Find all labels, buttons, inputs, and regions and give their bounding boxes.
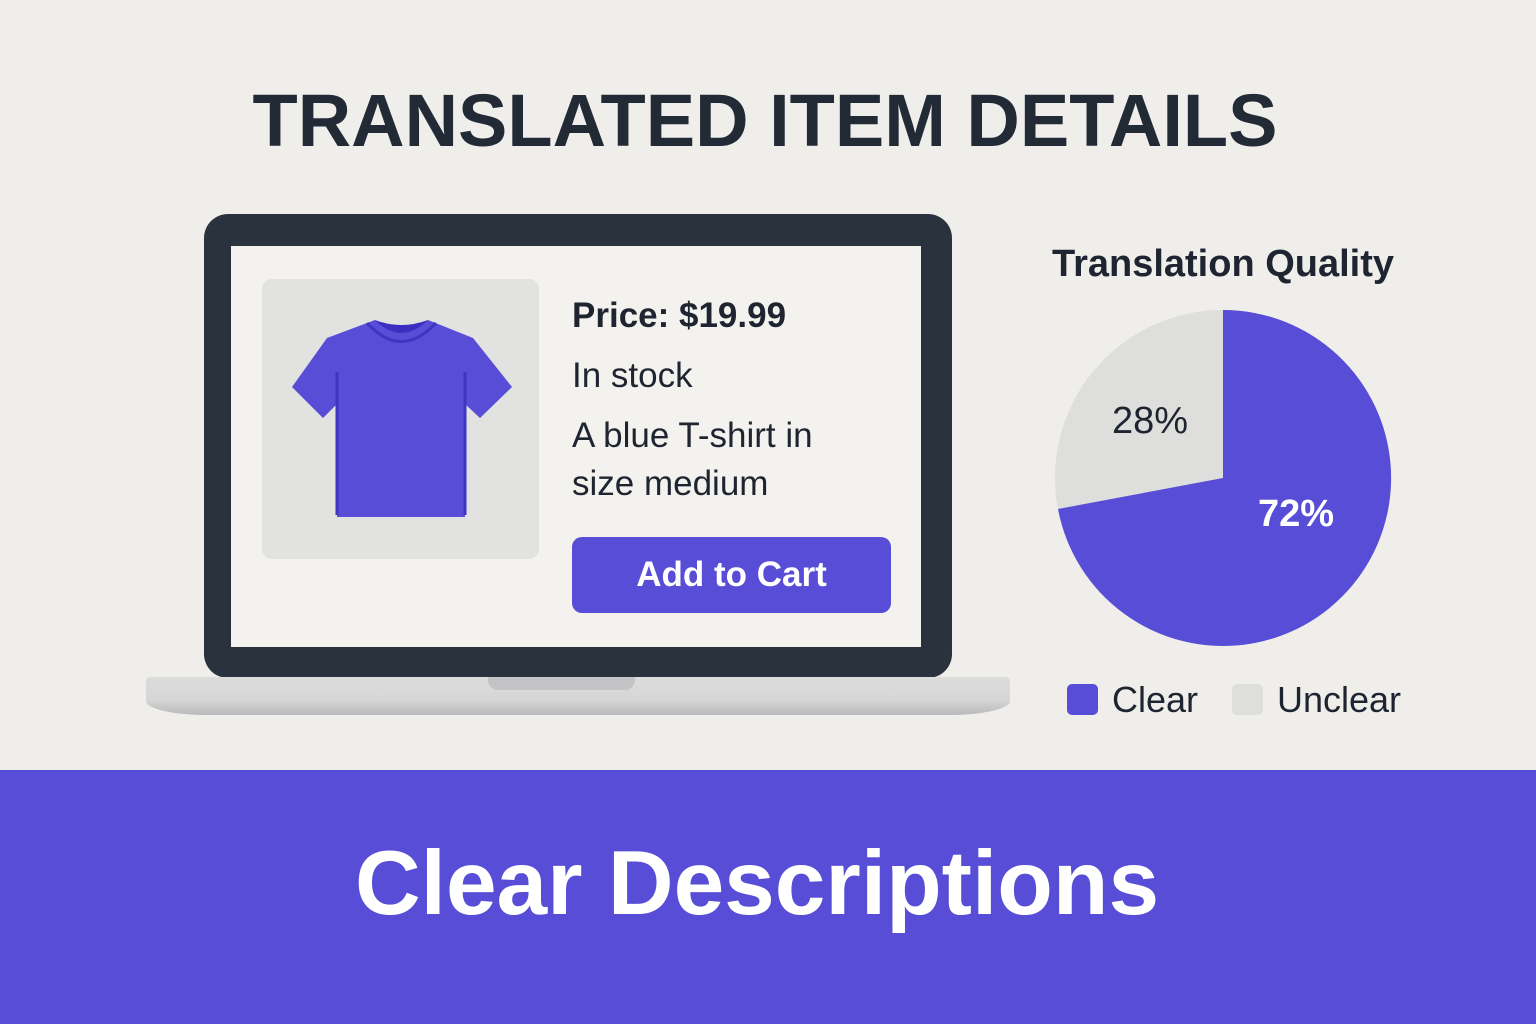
product text: A blue T-shirt in xyxy=(572,416,813,455)
product text: size medium xyxy=(572,464,768,503)
pie chart xyxy=(1055,310,1392,646)
legend: unclear: Unclear xyxy=(1277,679,1401,720)
chart title: Translation Quality xyxy=(1052,243,1394,285)
laptop base xyxy=(146,677,1010,715)
laptop screen xyxy=(231,246,921,647)
icon: t-shirt xyxy=(292,320,512,517)
button: add to cart: Add to Cart xyxy=(636,555,827,594)
banner text: Clear Descriptions xyxy=(355,833,1159,934)
product text: In stock xyxy=(572,356,693,395)
legend: clear: Clear xyxy=(1112,679,1198,720)
product text xyxy=(572,296,813,503)
button: add to cart xyxy=(572,537,891,613)
legend xyxy=(1067,679,1401,720)
pie chart: 28% xyxy=(1112,400,1188,442)
product image box xyxy=(262,279,539,559)
pie chart: 72% xyxy=(1258,493,1334,535)
laptop notch xyxy=(488,677,635,690)
bottom banner xyxy=(0,770,1536,1024)
laptop frame xyxy=(204,214,952,678)
laptop xyxy=(146,214,1010,715)
title: TRANSLATED ITEM DETAILS xyxy=(252,79,1277,162)
product text: Price: $19.99 xyxy=(572,296,786,335)
legend: clear xyxy=(1067,679,1198,720)
